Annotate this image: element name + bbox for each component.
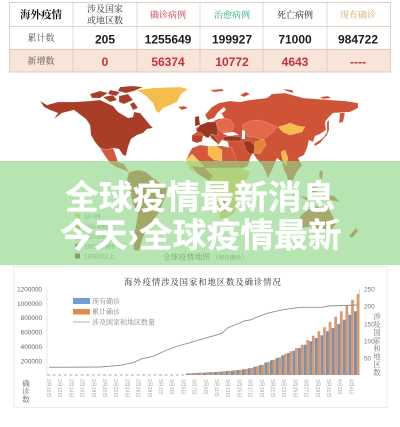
- table header row: 死亡病例: [277, 9, 313, 20]
- cumulative confirmed bars: [189, 294, 359, 375]
- left axis labels: 800000: [21, 315, 42, 322]
- date axis labels: 2月26日: [135, 379, 141, 397]
- green banner overlay: [0, 161, 400, 265]
- date axis labels: 2月12日: [56, 379, 62, 397]
- map legend: 100-499: [84, 224, 108, 231]
- map: Afghanistan and Pakistan: [254, 139, 266, 154]
- table header row: [20, 3, 376, 26]
- date axis labels: 2月18日: [90, 379, 96, 397]
- left axis labels: 1000000: [17, 301, 42, 308]
- date axis labels: 2月28日: [146, 379, 152, 397]
- left axis title: 数: [22, 394, 30, 404]
- table row: cumulative: 1255649: [145, 32, 192, 46]
- map: Italy: [210, 134, 220, 144]
- right axis title: 数: [373, 367, 381, 377]
- map: Southeast Asia yellow patch: [281, 150, 288, 166]
- map: West Africa patches: [191, 166, 230, 212]
- map: Japan: [314, 120, 329, 146]
- map legend: 500-999: [84, 234, 108, 241]
- map: Mauritania and Mali: [186, 154, 204, 172]
- panel: line and bar chart: [14, 266, 387, 408]
- date axis labels: 3月19日: [258, 379, 264, 397]
- right axis labels: [364, 286, 375, 362]
- map: Kazakhstan and Central Asia: [242, 120, 277, 140]
- left axis labels: 1200000: [17, 286, 42, 294]
- date axis labels: 4月4日: [347, 379, 353, 395]
- date axis labels: [45, 379, 353, 397]
- panel: overseas epidemic data table: [10, 2, 390, 72]
- date axis labels: 3月3日: [168, 379, 174, 395]
- chart title: 海外疫情涉及国家和地区数及确诊情况: [124, 277, 282, 287]
- map legend: [75, 214, 116, 260]
- map: Western Europe: [196, 122, 218, 138]
- date axis labels: 3月29日: [314, 379, 320, 397]
- map: Baltic Sea: [214, 107, 226, 118]
- map: Indonesia and Philippines: [288, 170, 340, 202]
- map: Iceland, Svalbard, Novaya Zemlya: [178, 89, 331, 110]
- table row: new cases: 4643: [282, 55, 309, 69]
- baseline early small bars: [47, 374, 186, 376]
- map: Eastern Europe: [216, 118, 234, 132]
- table header row: 确诊病例: [150, 9, 186, 20]
- banner title: 全球疫情最新消息: [65, 179, 335, 217]
- right axis title: 和: [373, 343, 381, 353]
- map: Kamchatka island: [339, 113, 345, 123]
- right axis title: 及: [373, 320, 381, 329]
- date axis labels: 3月27日: [303, 379, 309, 397]
- table row: new cases: 新增数: [27, 55, 55, 66]
- right axis labels: 150: [364, 322, 375, 328]
- date axis labels: 3月7日: [191, 379, 197, 395]
- map: Black Sea: [222, 132, 239, 136]
- left axis title: [22, 378, 30, 404]
- table row: cumulative: 205: [95, 32, 115, 46]
- map: Mexico and Central America: [100, 148, 129, 172]
- map legend: 10000以上: [84, 252, 116, 260]
- table header row: 或地区数: [87, 14, 123, 26]
- table row: cumulative: [27, 32, 378, 46]
- right axis title: [373, 311, 381, 377]
- date axis labels: 2月24日: [123, 379, 129, 397]
- map caption: 全球疫情地图 （现有确诊）: [163, 252, 247, 262]
- date axis labels: 3月21日: [269, 379, 275, 397]
- date axis labels: 3月13日: [224, 379, 230, 397]
- map: Africa south: [189, 168, 250, 220]
- date axis labels: 2月20日: [101, 379, 107, 397]
- map: UK: [195, 116, 200, 126]
- left axis labels: 400000: [21, 344, 42, 351]
- chart legend: [73, 296, 155, 326]
- date axis labels: 3月23日: [280, 379, 286, 397]
- map: Caspian Sea: [242, 130, 245, 139]
- map: South America: [127, 170, 167, 251]
- right axis line: [358, 289, 360, 375]
- date axis labels: 2月22日: [112, 379, 118, 397]
- table row: cumulative: 984722: [338, 32, 378, 46]
- table header row: 治愈病例: [214, 9, 250, 20]
- date axis labels: 2月14日: [67, 379, 73, 397]
- date axis labels: 3月11日: [213, 379, 219, 397]
- world map: [40, 86, 358, 251]
- map: Africa north: [186, 145, 241, 171]
- right axis title: 国: [373, 328, 381, 337]
- table row: new cases: 56374: [151, 55, 185, 69]
- right axis labels: 250: [364, 286, 375, 294]
- right axis labels: 50: [364, 356, 372, 362]
- date axis labels: 3月31日: [325, 379, 331, 397]
- date axis labels: 2月16日: [79, 379, 85, 397]
- date axis labels: 4月2日: [336, 379, 342, 395]
- right axis labels: 200: [364, 304, 375, 310]
- date axis labels: 2月10日: [45, 379, 51, 397]
- table row: new cases: [27, 55, 366, 69]
- map: Greenland: [137, 87, 188, 113]
- left axis labels: 200000: [21, 358, 42, 366]
- table row: new cases: 0: [102, 55, 109, 69]
- right axis title: 地: [373, 351, 381, 361]
- table header row: 海外疫情: [20, 8, 62, 21]
- map: Madagascar: [241, 196, 247, 211]
- date axis labels: 3月15日: [235, 379, 241, 397]
- map: Spain and Portugal: [192, 135, 203, 143]
- countries count line: [49, 305, 357, 367]
- map legend: 10-99: [84, 214, 101, 220]
- table header row: 现有确诊: [340, 9, 376, 20]
- left axis title: 确: [22, 378, 30, 388]
- banner title: 今天›全球疫情最新: [60, 217, 342, 255]
- left axis labels: 600000: [21, 330, 42, 336]
- map: Eurasia: [192, 93, 358, 188]
- chart legend: 涉及国家和地区数量: [92, 318, 155, 326]
- date axis labels: 3月5日: [179, 379, 185, 395]
- table row: cumulative: 199927: [212, 32, 252, 46]
- legend swatches: [75, 214, 80, 258]
- date axis labels: 3月17日: [247, 379, 253, 397]
- map: Australia: [300, 204, 336, 232]
- map: Iran: [243, 141, 256, 154]
- date axis labels: 3月1日: [157, 379, 163, 395]
- chart legend: 现有确诊: [92, 296, 120, 306]
- table header row: 涉及国家: [87, 3, 123, 14]
- left axis labels: [17, 286, 42, 366]
- right axis title: 区: [373, 360, 381, 369]
- table row: cumulative: 71000: [278, 32, 312, 46]
- table row: new cases: 10772: [215, 55, 249, 69]
- left axis title: 诊: [22, 386, 30, 396]
- date axis labels: 3月9日: [202, 379, 208, 395]
- map: Libya: [208, 146, 222, 161]
- map legend: 1000-9999: [84, 244, 115, 250]
- date axis labels: 3月25日: [291, 379, 297, 397]
- banner title: [60, 179, 342, 255]
- map: New Zealand: [349, 228, 358, 238]
- right axis title: 涉: [373, 311, 381, 321]
- right axis title: 家: [373, 335, 381, 345]
- table row: cumulative: 累计数: [27, 32, 55, 43]
- chart legend: 累计确诊: [92, 307, 120, 316]
- map: Mongolia: [278, 123, 305, 135]
- map: Turkey: [223, 136, 241, 141]
- table row: new cases: ----: [350, 55, 366, 69]
- current confirmed bars: [186, 311, 357, 375]
- right axis labels: 100: [364, 338, 375, 346]
- map: North America: [40, 86, 153, 156]
